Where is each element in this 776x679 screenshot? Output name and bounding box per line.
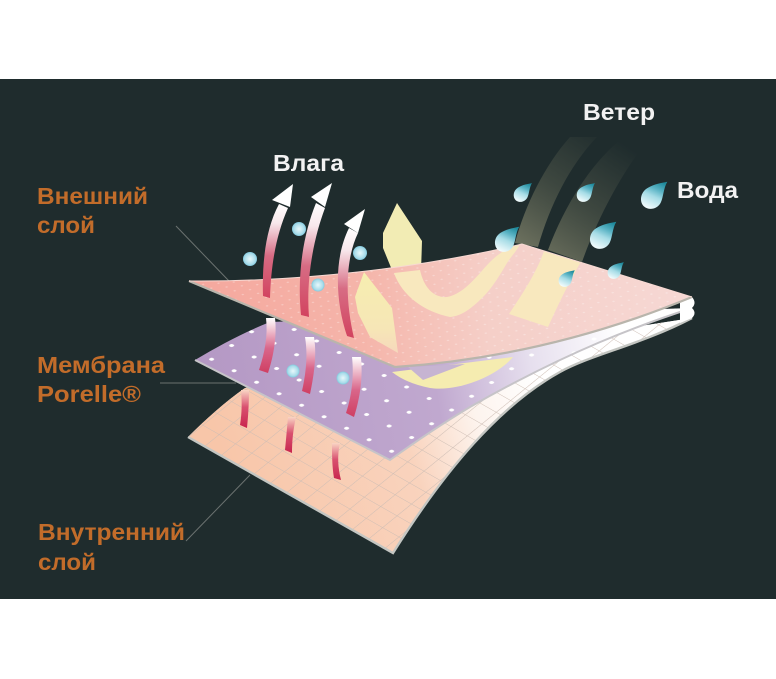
inner layer — [188, 318, 692, 553]
membrane layer — [195, 308, 692, 460]
label: outer layer — [37, 183, 148, 238]
label: inner layer: Внутренний — [38, 519, 185, 545]
white edge tips at right — [680, 297, 694, 323]
leader line: membrane — [160, 382, 236, 384]
lilac patch on crescent — [408, 364, 465, 380]
moisture arrow 1 — [263, 184, 293, 298]
label: membrane: Мембрана — [37, 352, 165, 378]
label: membrane — [37, 352, 165, 407]
yellow wind arrow behind outer layer — [383, 203, 422, 275]
leader line: inner layer — [186, 475, 250, 541]
dark background panel — [0, 79, 776, 599]
moisture droplets near outer layer — [243, 222, 367, 292]
outer layer — [189, 240, 692, 367]
wind bands seen through outer layer — [394, 240, 582, 327]
label: wind: Ветер — [583, 99, 655, 125]
moisture strokes through inner layer — [240, 390, 341, 480]
label: membrane: Porelle® — [37, 381, 141, 407]
moisture strokes through membrane — [259, 318, 362, 417]
yellow wind arrow over outer layer — [355, 272, 398, 353]
yellow crescent on membrane — [392, 357, 513, 389]
water drops — [495, 182, 667, 287]
label: outer layer: Внешний — [37, 183, 148, 209]
moisture arrow 2 — [300, 183, 332, 317]
label: water: Вода — [677, 177, 738, 203]
moisture droplets on membrane — [286, 364, 350, 384]
moisture arrow 3 — [338, 209, 365, 338]
leader line: outer layer — [176, 226, 229, 281]
label: moisture: Влага — [273, 150, 344, 176]
label: inner layer — [38, 519, 185, 575]
label: inner layer: слой — [38, 549, 96, 575]
label: outer layer: слой — [37, 212, 95, 238]
wind bands — [515, 137, 648, 262]
